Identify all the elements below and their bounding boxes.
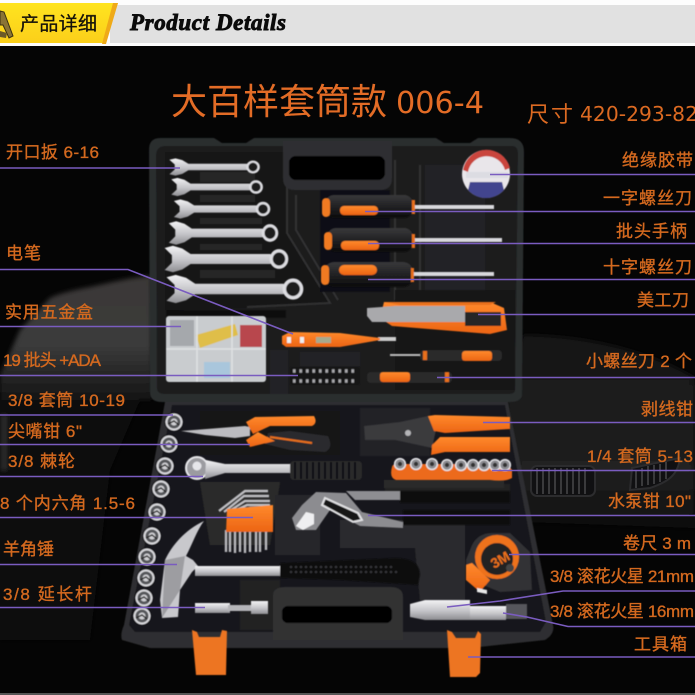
orange latch right: [447, 630, 481, 677]
toolbox upper half: [149, 138, 524, 402]
quarter inch socket rail: [391, 459, 512, 481]
voltage tester pen: [282, 332, 396, 347]
label: hardware box: 实用五金盒: [5, 303, 93, 322]
label: cross screwdriver: 十字螺丝刀: [603, 258, 692, 277]
orange latch left: [192, 630, 227, 675]
claw hammer: [160, 521, 420, 618]
tools: [132, 150, 532, 677]
ratchet: [186, 457, 362, 480]
dimensions value: 420-293-82: [580, 102, 695, 126]
hardware box: [166, 316, 266, 382]
main title: 大百样套筒款: [171, 81, 387, 122]
label: ratchet: 3/8 棘轮: [8, 452, 75, 471]
label: toolbox: 工具箱: [634, 635, 687, 654]
callout leader lines: [0, 168, 695, 657]
header yellow tab: [0, 3, 118, 43]
label: extension bar: 3/8 延长杆: [3, 585, 92, 604]
label: sockets: 3/8 套筒 10-19: [8, 391, 125, 410]
label: water pump pliers: 水泵钳 10": [608, 492, 691, 511]
wrench bay recess: [165, 152, 330, 310]
label: spark plug socket 21mm: 3/8 滚花火星 21mm: [550, 567, 694, 586]
label: quarter inch sockets: 1/4 套筒 5-13: [587, 447, 693, 466]
header tab orange edge: [102, 3, 118, 44]
label: small screwdrivers: 小螺丝刀 2 个: [586, 352, 692, 371]
screwdriver 2: [324, 228, 502, 252]
label: bit handle: 批头手柄: [616, 222, 687, 241]
toolbox lower half: [121, 402, 553, 648]
label: bits: 19 批头 +ADA: [3, 351, 102, 370]
label: flat screwdriver: 一字螺丝刀: [603, 189, 692, 208]
screwdriver 3: [321, 262, 494, 287]
water pump pliers: [292, 491, 510, 530]
label: needle nose pliers: 尖嘴钳 6": [8, 422, 82, 441]
label: spark plug socket 16mm: 3/8 滚花火星 16mm: [550, 602, 694, 621]
carrying handle lower: [273, 587, 403, 640]
model number: 006-4: [396, 86, 484, 121]
tray ridges: [247, 160, 483, 307]
small screwdriver 2: [367, 372, 452, 383]
wrench bay panels: [200, 172, 275, 278]
label: insulating tape: 绝缘胶带: [622, 151, 693, 170]
carrying handle upper: [283, 141, 392, 190]
label: open-end wrench: 开口扳 6-16: [6, 143, 99, 162]
needle nose pliers: [181, 416, 330, 452]
label: hex keys: 8 个内六角 1.5-6: [0, 494, 135, 513]
dimensions label: 尺寸: [527, 102, 573, 127]
background car silhouette: [0, 276, 695, 640]
label: claw hammer: 羊角锤: [3, 540, 54, 559]
label: wire stripper: 剥线钳: [641, 400, 693, 419]
background car grilles: [531, 458, 680, 496]
bottom edge: [0, 693, 695, 695]
wire stripper: [364, 415, 510, 455]
label: utility knife: 美工刀: [637, 291, 689, 310]
header bar: [0, 0, 695, 46]
screwdriver 1: [322, 195, 494, 218]
extension bar: [195, 601, 268, 614]
spark plug sockets: [410, 600, 527, 620]
header grey band: [110, 5, 695, 43]
tape measure: [466, 533, 532, 594]
lower tray blocks: [200, 411, 340, 455]
utility knife: [367, 302, 507, 334]
socket column: [132, 412, 184, 626]
label: tape measure: 卷尺 3 m: [623, 534, 691, 553]
wrench set: [165, 158, 302, 303]
small screwdriver 1: [390, 350, 502, 361]
insulating tape: [462, 150, 510, 198]
label: tester pen: 电笔: [6, 244, 41, 263]
icon: compass: [0, 11, 13, 38]
bit set: [290, 367, 360, 385]
header English title: Product Details: [129, 10, 286, 35]
tape measure 3M logo: 3M: [488, 548, 512, 572]
header Chinese title: 产品详细: [20, 13, 97, 35]
toolbox: [121, 138, 553, 648]
hex key set: [219, 491, 273, 553]
